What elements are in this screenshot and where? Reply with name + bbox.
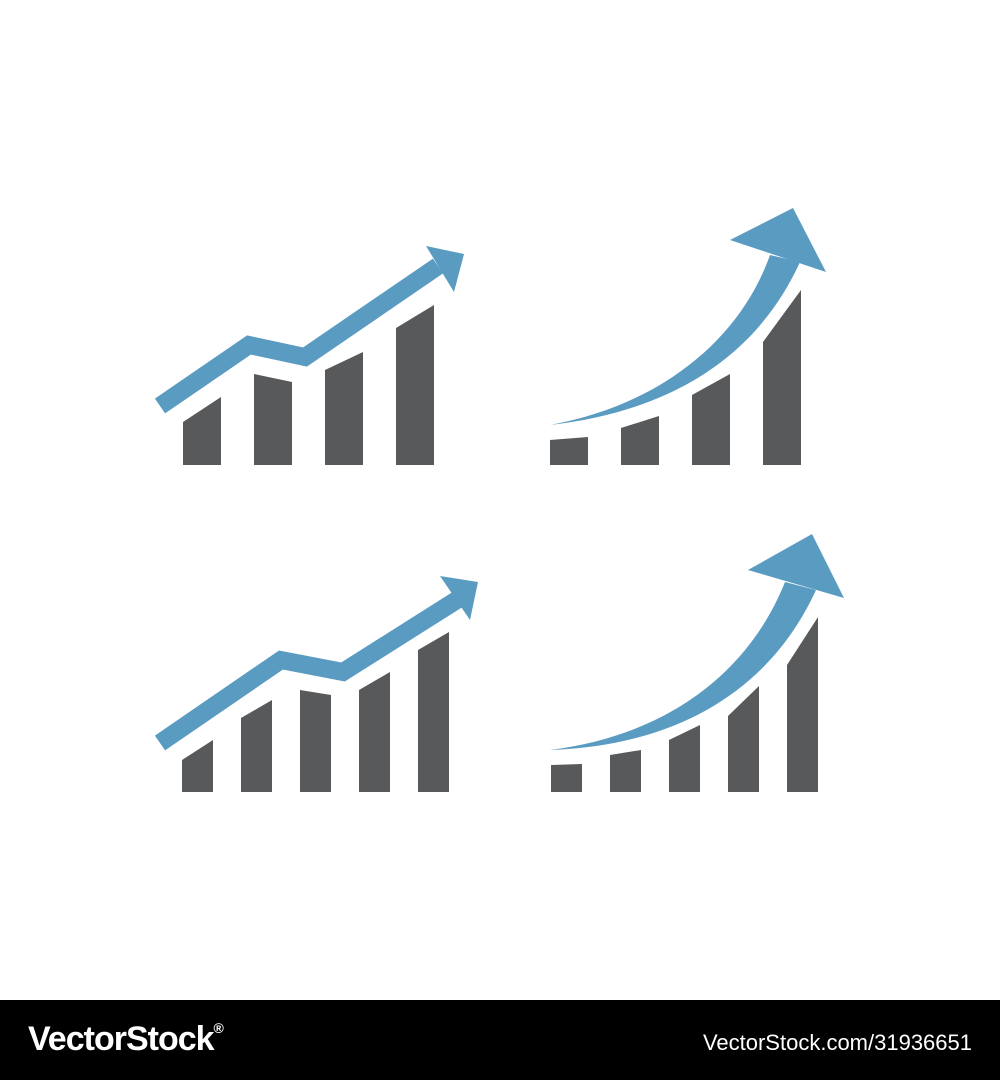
icon: line chart with five bars bottom-left	[160, 576, 478, 792]
footer bar	[0, 1000, 1000, 1080]
icon: curved arrow chart top-right	[550, 208, 826, 465]
brand text: VectorStock®	[28, 1020, 223, 1058]
icon: line chart with bars top-left	[160, 246, 464, 465]
icon: curved arrow chart bottom-right	[550, 534, 844, 792]
image id url: VectorStock.com/31936651	[703, 1030, 972, 1055]
